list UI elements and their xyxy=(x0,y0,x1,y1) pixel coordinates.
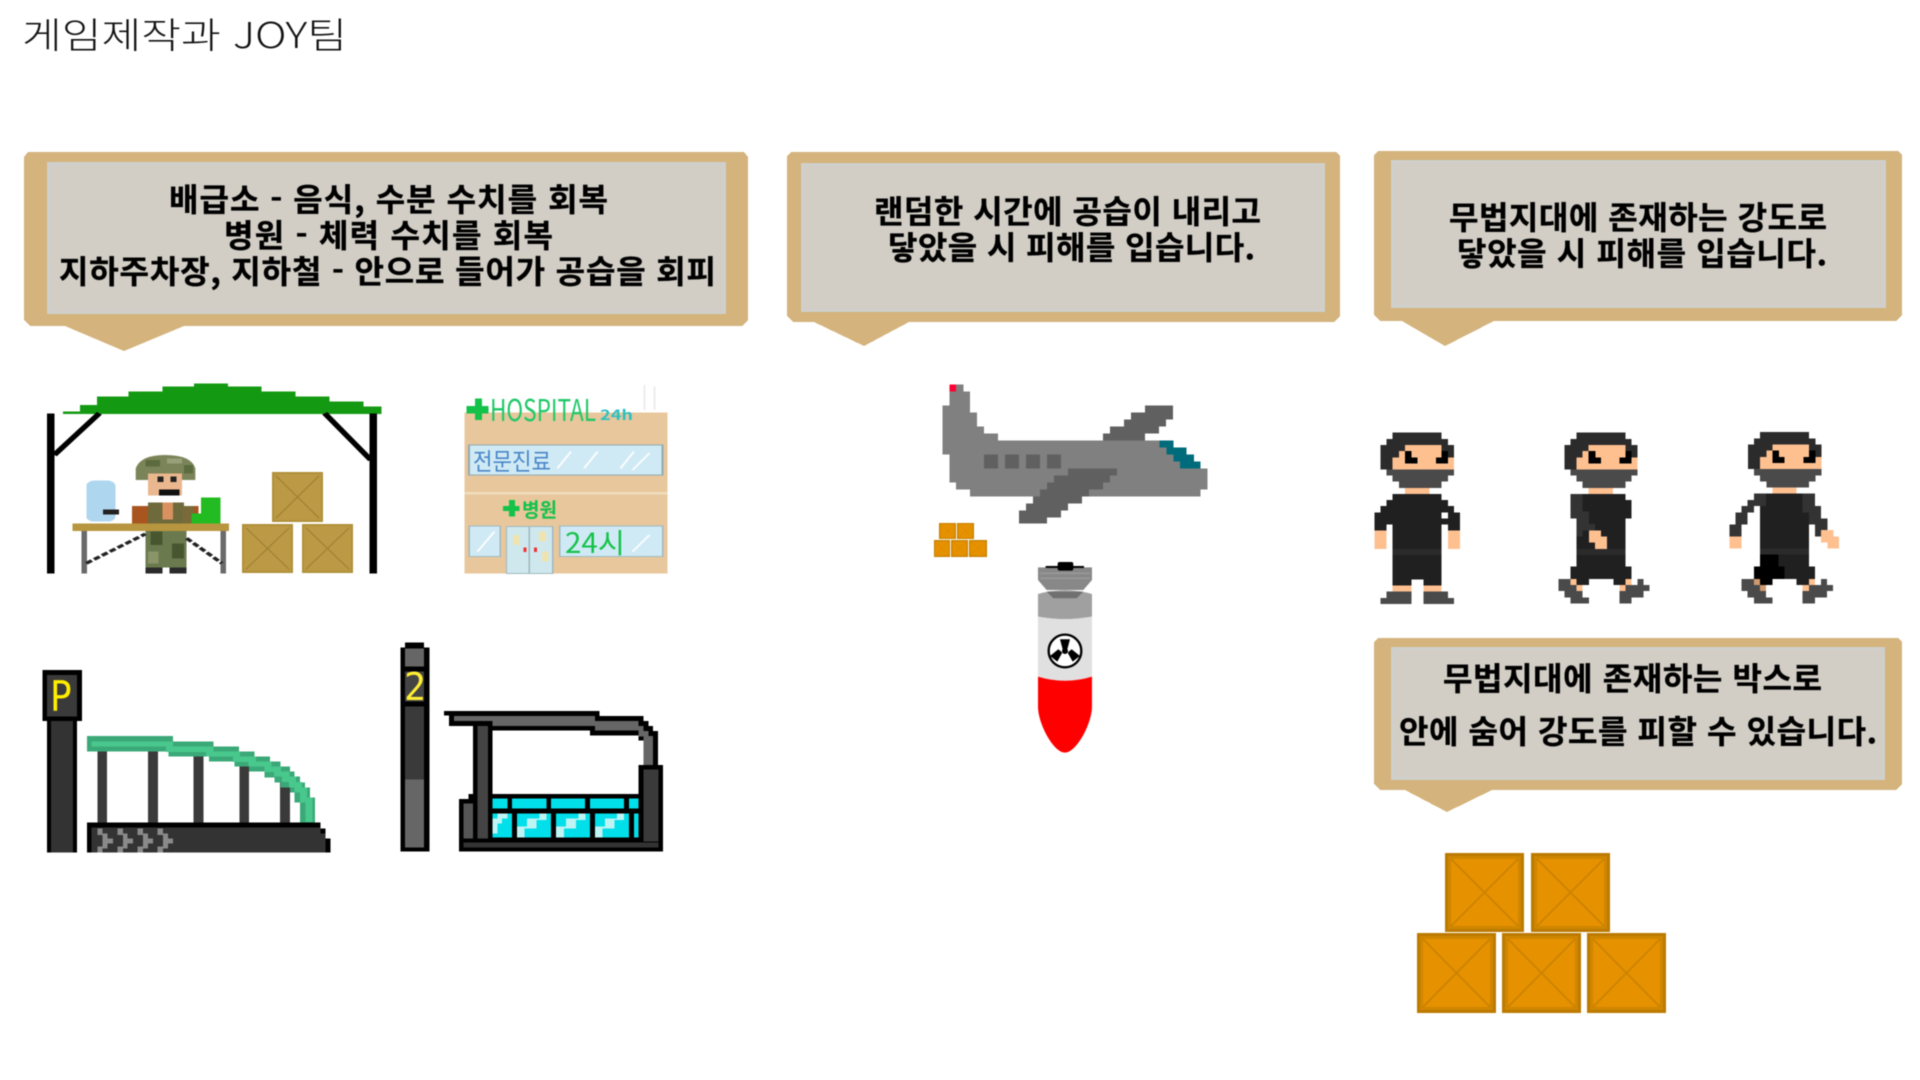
text: air raid description xyxy=(874,187,1261,269)
icon: hospital building: HOSPITAL xyxy=(490,386,596,430)
panel: supply callout xyxy=(24,152,748,351)
icon: hospital building: 병원 xyxy=(522,494,557,523)
icon: subway entrance: 2 xyxy=(404,665,426,709)
icon: hospital building: 전문진료 xyxy=(473,442,551,477)
icon: falling bomb xyxy=(1038,562,1092,753)
helmet xyxy=(136,455,195,480)
text: shelter descriptions: 지하주차장, 지하철 - 안으로 들어가 공습을 회피 xyxy=(59,247,716,293)
icon: underground parking entrance: P xyxy=(50,672,72,721)
icon: supply tent with soldier xyxy=(47,383,381,573)
panel: hiding box callout xyxy=(1374,638,1902,812)
title: 게임제작과 JOY팀 xyxy=(22,7,347,59)
text: shelter descriptions: 병원 - 체력 수치를 회복 xyxy=(224,211,553,257)
icon: grey airplane xyxy=(942,384,1208,524)
icon: underground parking entrance xyxy=(42,670,330,853)
panel: bandits callout xyxy=(1374,151,1902,346)
icon: hospital building: 24h xyxy=(600,405,633,425)
text: hiding box description xyxy=(1399,654,1877,753)
text: hiding box description: 안에 숨어 강도를 피할 수 있습니다. xyxy=(1399,707,1877,753)
icon: subway entrance xyxy=(400,643,663,852)
icon: small orange crates xyxy=(934,523,987,557)
icon: brown crates xyxy=(242,472,353,573)
text: bandit description: 무법지대에 존재하는 강도로 xyxy=(1449,193,1827,239)
icon: bandit with arms out xyxy=(1729,432,1839,603)
text: bandit description xyxy=(1449,193,1827,275)
icon: hospital building xyxy=(464,385,667,573)
panel: air raid callout xyxy=(787,152,1340,346)
icon: hospital building: 24시 xyxy=(565,522,625,562)
text: shelter descriptions xyxy=(59,175,716,293)
icon: large orange crates xyxy=(1417,853,1666,1013)
icon: bandit standing xyxy=(1374,432,1460,604)
icon: bandit walking xyxy=(1558,432,1650,603)
text: hiding box description: 무법지대에 존재하는 박스로 xyxy=(1443,654,1822,700)
text: bandit description: 닿았을 시 피해를 입습니다. xyxy=(1457,229,1827,275)
text: shelter descriptions: 배급소 - 음식, 수분 수치를 회복 xyxy=(169,175,608,221)
text: air raid description: 닿았을 시 피해를 입습니다. xyxy=(888,223,1255,269)
text: air raid description: 랜덤한 시간에 공습이 내리고 xyxy=(874,187,1261,233)
